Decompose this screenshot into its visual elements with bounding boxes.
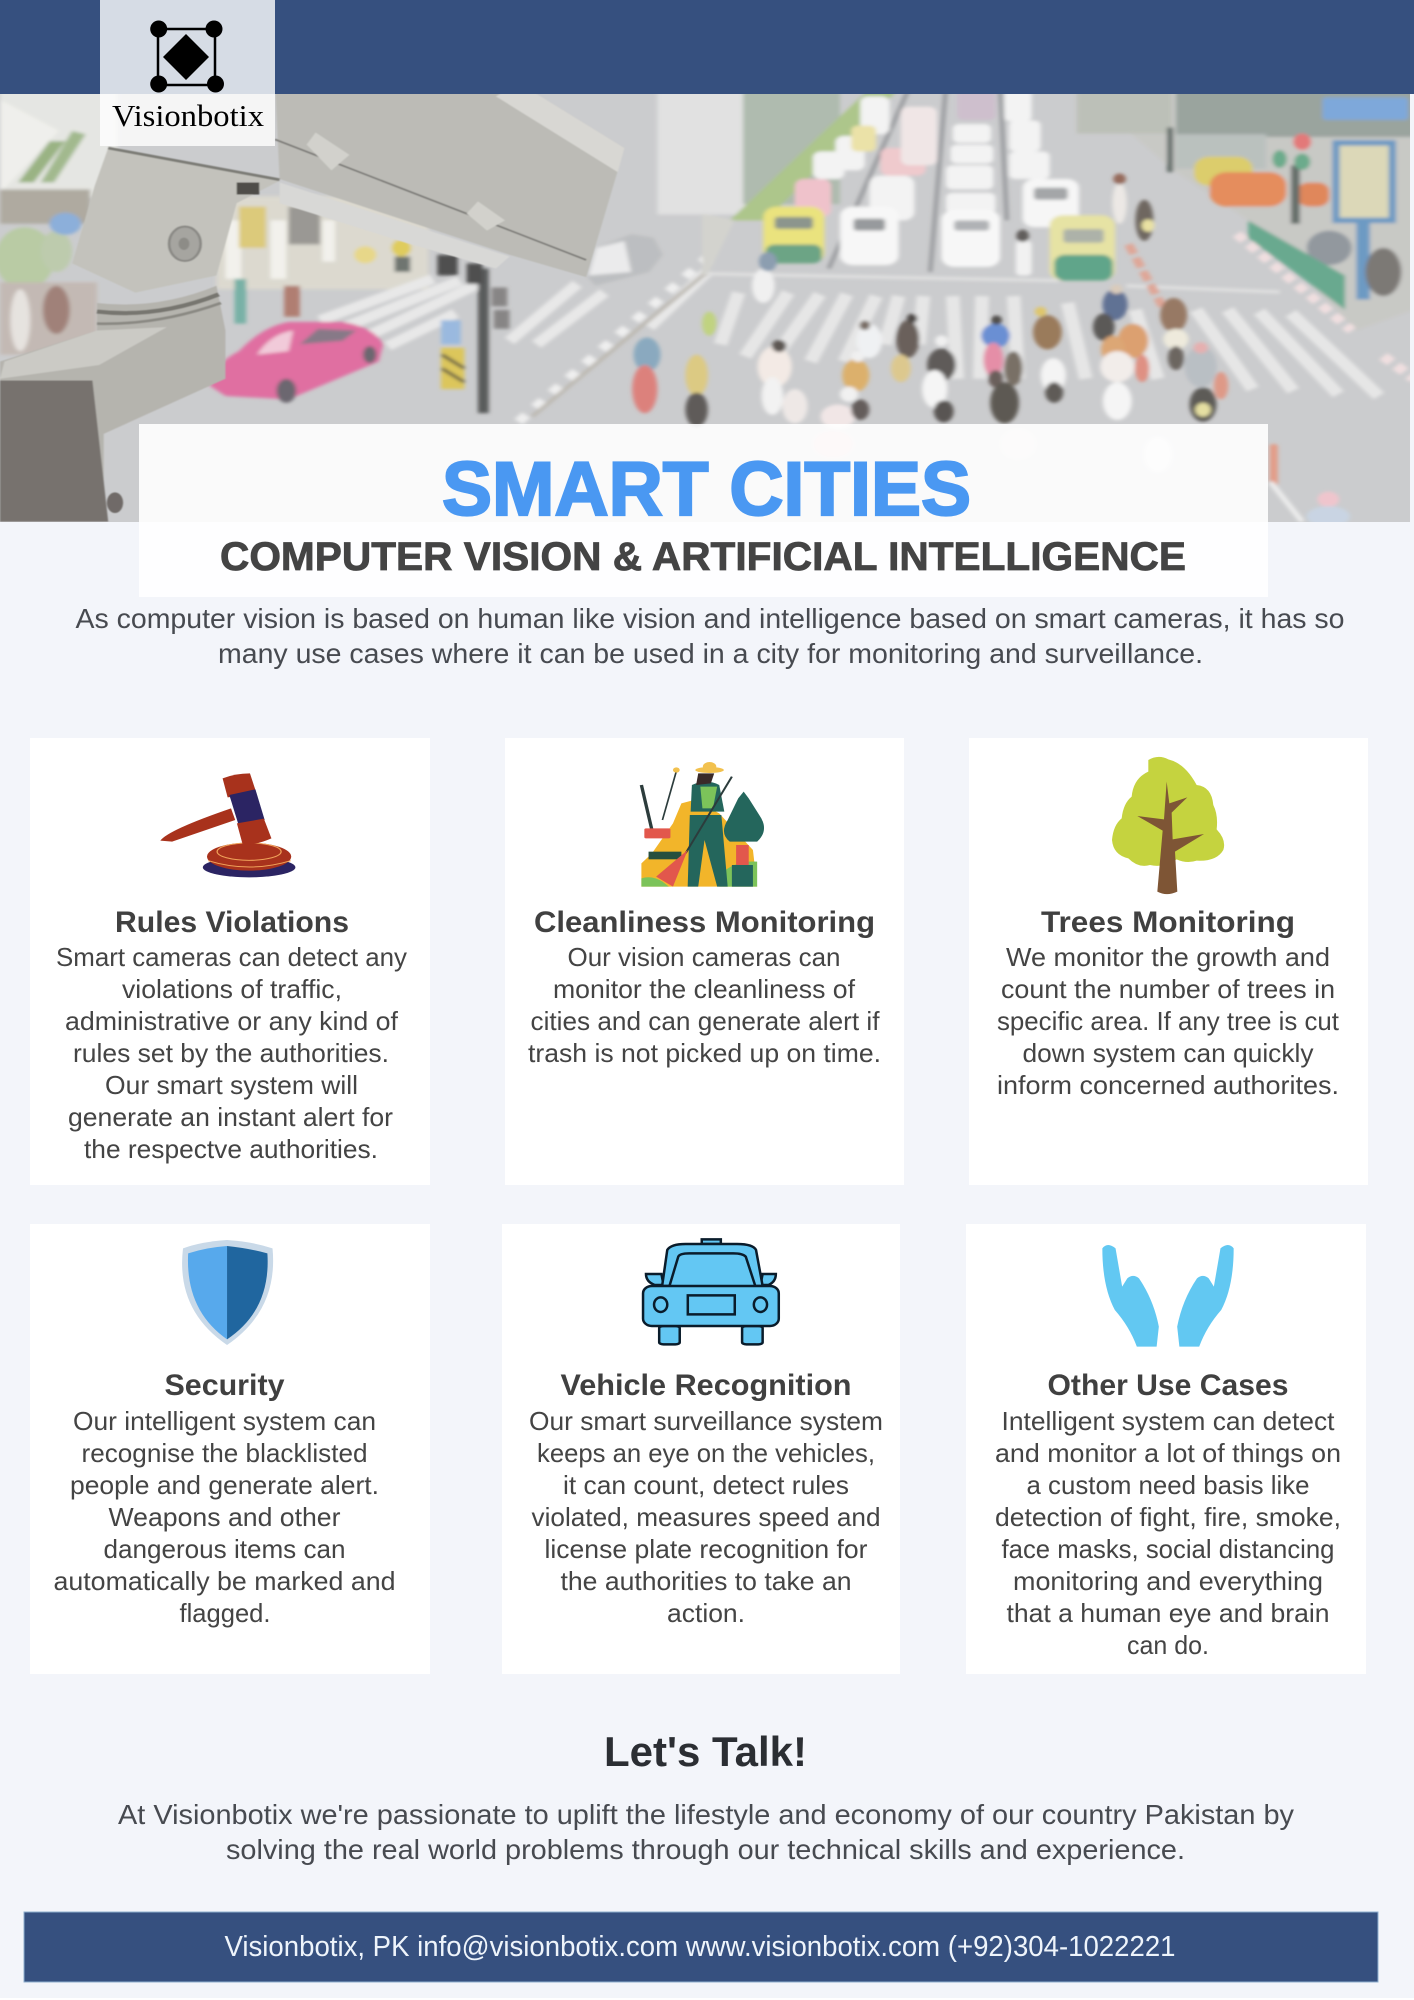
intro text: As computer vision is based on human like vision and intelligence based on smart cameras, it has so (76, 603, 1344, 634)
body text (528, 942, 881, 1068)
closing text: At Visionbotix we're passionate to uplift the lifestyle and economy of our country Pakistan by (118, 1799, 1294, 1830)
heading: Security (164, 1369, 285, 1402)
body text: Our intelligent system can (73, 1406, 376, 1436)
body text: automatically be marked and (54, 1566, 396, 1596)
body text: the respectve authorities. (84, 1134, 378, 1164)
panel: security (30, 1224, 430, 1674)
body text (997, 942, 1340, 1100)
hero photo: surveillance camera over a traffic intersection (0, 83, 1414, 527)
icon: gavel (160, 773, 295, 877)
body text: a custom need basis like (1026, 1470, 1310, 1500)
heading: Other Use Cases (1048, 1369, 1288, 1402)
body text: Intelligent system can detect (1002, 1406, 1335, 1436)
logo mark (150, 20, 224, 92)
intro text (76, 603, 1344, 669)
intro text: many use cases where it can be used in a city for monitoring and surveillance. (218, 638, 1203, 669)
body text: dangerous items can (104, 1534, 346, 1564)
body text: violated, measures speed and (532, 1502, 880, 1532)
heading: Rules Violations (115, 906, 349, 939)
body text: it can count, detect rules (563, 1470, 849, 1500)
body text: generate an instant alert for (68, 1102, 393, 1132)
body text: Our vision cameras can (568, 942, 840, 972)
body text: Weapons and other (108, 1502, 341, 1532)
panel: vehicle recognition (502, 1224, 900, 1674)
panel: cleanliness monitoring (505, 738, 904, 1185)
body text: specific area. If any tree is cut (997, 1006, 1340, 1036)
body text: monitoring and everything (1013, 1566, 1323, 1596)
body text: can do. (1127, 1630, 1209, 1660)
heading: Vehicle Recognition (560, 1369, 852, 1402)
body text: rules set by the authorities. (73, 1038, 389, 1068)
subtitle: COMPUTER VISION & ARTIFICIAL INTELLIGENCE (220, 535, 1186, 579)
body text: Our smart surveillance system (529, 1406, 883, 1436)
title panel (139, 424, 1268, 597)
body text (54, 1406, 396, 1628)
body text: license plate recognition for (544, 1534, 868, 1564)
heading: let's talk: Let's Talk! (604, 1728, 807, 1775)
body text: trash is not picked up on time. (528, 1038, 881, 1068)
logo wordmark: Visionbotix (112, 98, 265, 133)
photo haze (0, 94, 1410, 522)
body text: Smart cameras can detect any (56, 942, 407, 972)
body text: cities and can generate alert if (530, 1006, 880, 1036)
icon: open hands (1102, 1245, 1234, 1347)
body text: down system can quickly (1022, 1038, 1314, 1068)
body text: detection of fight, fire, smoke, (995, 1502, 1341, 1532)
body text: recognise the blacklisted (82, 1438, 368, 1468)
body text: monitor the cleanliness of (553, 974, 856, 1004)
body text: We monitor the growth and (1006, 942, 1330, 972)
body text: count the number of trees in (1001, 974, 1335, 1004)
closing text: solving the real world problems through our technical skills and experience. (226, 1834, 1185, 1865)
body text: Our smart system will (105, 1070, 358, 1100)
panel: other use cases (966, 1224, 1366, 1674)
body text: the authorities to take an (560, 1566, 852, 1596)
body text: and monitor a lot of things on (995, 1438, 1341, 1468)
panel: rules violations (30, 738, 430, 1185)
body text: keeps an eye on the vehicles, (537, 1438, 875, 1468)
body text (56, 942, 407, 1164)
body text: administrative or any kind of (65, 1006, 399, 1036)
footer bar (24, 1912, 1378, 1982)
icon: car (643, 1239, 779, 1344)
camera housing and mount (0, 83, 624, 522)
body text: that a human eye and brain (1006, 1598, 1330, 1628)
icon: street cleaner (641, 762, 764, 887)
title: SMART CITIES (442, 447, 971, 532)
logo box (100, 0, 275, 146)
heading: Cleanliness Monitoring (534, 906, 875, 939)
heading: Trees Monitoring (1041, 906, 1295, 939)
body text: violations of traffic, (122, 974, 342, 1004)
contact details: Visionbotix, PK info@visionbotix.com www.visionbotix.com (+92)304-1022221 (224, 1931, 1176, 1963)
icon: tree (1112, 757, 1224, 894)
icon: shield (182, 1240, 273, 1345)
body text: face masks, social distancing (1002, 1534, 1334, 1564)
body text: inform concerned authorites. (997, 1070, 1339, 1100)
panel: trees monitoring (969, 738, 1368, 1185)
body text (529, 1406, 883, 1628)
body text: people and generate alert. (70, 1470, 379, 1500)
body text: flagged. (180, 1598, 270, 1628)
closing text (118, 1799, 1294, 1865)
body text: action. (667, 1598, 745, 1628)
header bar (0, 0, 1414, 94)
body text (995, 1406, 1341, 1660)
